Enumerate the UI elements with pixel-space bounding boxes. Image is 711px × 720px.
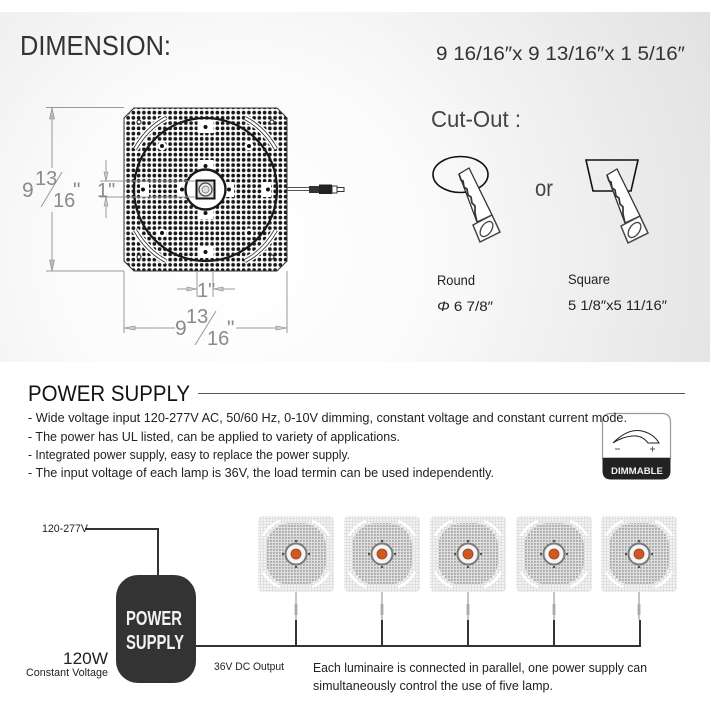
one inch horizontal dimension	[177, 271, 235, 302]
luminaire 4	[516, 516, 592, 620]
height dimension	[22, 108, 124, 271]
luminaire 5	[601, 516, 677, 620]
overall dimensions: 9 16/16″x 9 13/16″x 1 5/16″	[436, 44, 685, 65]
icon: square cut-out with saw	[586, 160, 648, 243]
power cable and connector	[287, 184, 344, 194]
luminaire 3	[430, 516, 506, 620]
width dimension: "	[227, 317, 234, 340]
height dimension: 9	[22, 179, 34, 202]
power supply box: SUPPLY	[126, 632, 184, 654]
one inch vertical dimension: 1"	[97, 180, 115, 202]
height dimension: 16	[53, 190, 75, 212]
square size: 5 1/8″x5 11/16″	[568, 297, 667, 313]
lamp body	[124, 108, 287, 271]
width dimension	[124, 271, 287, 350]
luminaire 2	[344, 516, 420, 620]
icon: dimmable badge: DIMMABLE	[611, 466, 663, 477]
text: parallel connection note	[313, 661, 647, 693]
lamp technical drawing	[22, 108, 344, 350]
label: round: Round	[437, 272, 475, 288]
text: parallel connection note: Each luminaire is connected in parallel, one power supply can	[313, 661, 647, 675]
round size: Φ 6 7/8″	[437, 298, 493, 314]
height dimension: 13	[35, 168, 57, 190]
panel: dimension background	[0, 12, 710, 362]
icon: round cut-out with saw	[433, 156, 500, 242]
text: or: or	[535, 175, 553, 201]
icon: dimmable badge	[602, 414, 670, 480]
label: constant voltage: Constant Voltage	[26, 667, 108, 679]
width dimension: 13	[186, 306, 208, 328]
label: DC output: 36V DC Output	[214, 661, 284, 673]
heading: dimension: DIMENSION:	[20, 30, 171, 61]
label: input voltage: 120-277V	[42, 523, 89, 535]
luminaire 1	[258, 516, 334, 620]
one inch vertical dimension	[97, 160, 195, 218]
heading: cut-out: Cut-Out :	[431, 106, 521, 132]
text: parallel connection note: simultaneously control the use of five lamp.	[313, 679, 553, 693]
label: 120W: 120W	[63, 649, 108, 668]
width dimension: 16	[207, 328, 229, 350]
text: power supply features: - Integrated power supply, easy to replace the power supply.	[28, 448, 350, 462]
heading: power supply: POWER SUPPLY	[28, 381, 190, 406]
label: square: Square	[568, 271, 610, 287]
output wiring	[196, 620, 641, 646]
text: power supply features: - The input voltage of each lamp is 36V, the load termin can be used independently.	[28, 466, 494, 480]
height dimension: "	[73, 179, 80, 202]
width dimension: 9	[175, 317, 187, 340]
input wire	[85, 529, 158, 576]
text: power supply features	[28, 411, 627, 480]
text: power supply features: - Wide voltage input 120-277V AC, 50/60 Hz, 0-10V dimming, constant voltage and constant current mode.	[28, 411, 627, 425]
power supply box: POWER	[126, 608, 182, 630]
power supply box	[116, 575, 196, 683]
text: power supply features: - The power has UL listed, can be applied to variety of applications.	[28, 430, 400, 444]
one inch horizontal dimension: 1"	[197, 280, 215, 302]
